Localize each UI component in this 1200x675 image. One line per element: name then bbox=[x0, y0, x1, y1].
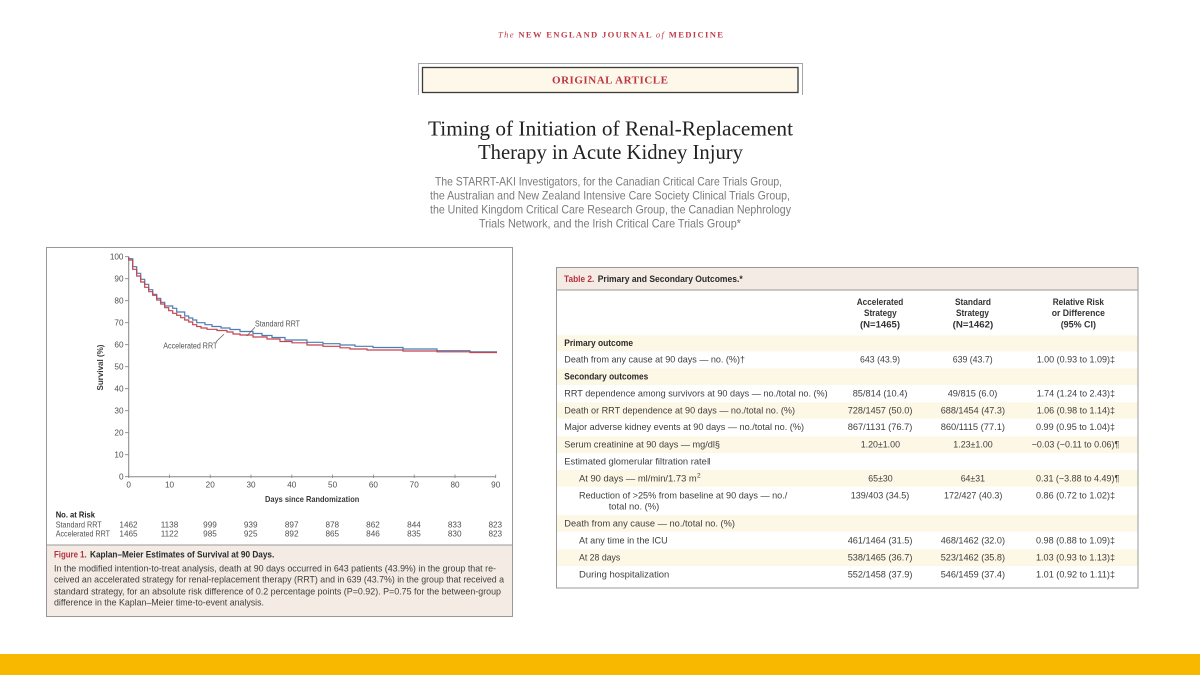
column: accelerated strategy values: 867/1131 (76.7) bbox=[848, 421, 912, 432]
column headers: Relative Risk bbox=[1053, 297, 1105, 307]
number at risk table: 939 bbox=[244, 521, 258, 530]
y axis labels: 30 bbox=[114, 407, 124, 416]
figure caption: In the modified intention-to-treat analysis, death at 90 days occurred in 643 patients (43.9%) in the group that re- bbox=[54, 562, 496, 573]
curve: standard RRT bbox=[129, 257, 497, 352]
y axis title: Survival (%) bbox=[95, 344, 105, 390]
x axis labels: 90 bbox=[491, 481, 501, 490]
y axis labels: 70 bbox=[114, 319, 124, 328]
y axis labels: 90 bbox=[114, 275, 124, 284]
column: accelerated strategy values: 461/1464 (31.5) bbox=[848, 535, 912, 546]
curve: accelerated RRT bbox=[129, 258, 497, 352]
figure caption bbox=[46, 545, 512, 616]
x axis labels: 0 bbox=[126, 481, 131, 490]
row bands bbox=[557, 335, 1138, 566]
row labels: Primary outcome bbox=[564, 337, 633, 348]
column headers: (N=1465) bbox=[860, 319, 900, 329]
number at risk table bbox=[56, 510, 503, 539]
row labels bbox=[564, 337, 828, 580]
article type banner: ORIGINAL ARTICLE bbox=[552, 75, 668, 87]
row labels: Major adverse kidney events at 90 days — no./total no. (%) bbox=[564, 421, 804, 432]
label: accelerated RRT bbox=[163, 334, 224, 350]
label: accelerated RRT: Accelerated RRT bbox=[163, 341, 217, 350]
panel: figure 1 Kaplan-Meier bbox=[46, 248, 512, 616]
x axis labels: 40 bbox=[287, 481, 297, 490]
number at risk table: 897 bbox=[285, 521, 299, 530]
column: accelerated strategy values: 552/1458 (37.9) bbox=[848, 569, 912, 580]
y axis labels: 60 bbox=[114, 341, 124, 350]
number at risk table: 823 bbox=[488, 530, 503, 539]
row labels: Serum creatinine at 90 days — mg/dl§ bbox=[564, 438, 720, 449]
row labels: Death from any cause — no./total no. (%) bbox=[564, 518, 735, 529]
row labels: At 28 days bbox=[579, 552, 621, 563]
row labels: total no. (%) bbox=[609, 501, 659, 512]
article title: Therapy in Acute Kidney Injury bbox=[478, 140, 743, 164]
article title bbox=[428, 117, 793, 164]
label: standard RRT bbox=[247, 319, 300, 336]
x axis labels: 30 bbox=[246, 481, 256, 490]
column: relative risk values: 0.31 (−3.88 to 4.49)¶ bbox=[1036, 472, 1119, 483]
column: accelerated strategy values: 139/403 (34.5) bbox=[851, 489, 909, 500]
number at risk table: Standard RRT bbox=[56, 521, 102, 530]
author list: the Australian and New Zealand Intensive Care Society Clinical Trials Group, bbox=[430, 189, 790, 202]
figure caption: Kaplan–Meier Estimates of Survival at 90 Days. bbox=[90, 548, 274, 559]
row labels: At 90 days — ml/min/1.73 m bbox=[579, 472, 697, 483]
y axis labels: 100 bbox=[110, 253, 124, 262]
x axis labels: 70 bbox=[410, 481, 419, 490]
number at risk table: 862 bbox=[366, 521, 380, 530]
x axis title: Days since Randomization bbox=[265, 494, 359, 504]
number at risk table: 846 bbox=[366, 530, 380, 539]
number at risk table: Accelerated RRT bbox=[56, 530, 110, 539]
column: standard strategy values: 546/1459 (37.4) bbox=[941, 569, 1005, 580]
column: standard strategy values: 639 (43.7) bbox=[953, 354, 993, 365]
column headers: (N=1462) bbox=[953, 319, 993, 329]
author list bbox=[430, 176, 791, 230]
number at risk table: 865 bbox=[325, 530, 340, 539]
number at risk table: 1138 bbox=[161, 521, 179, 530]
panel: table 2 outcomes bbox=[556, 268, 1138, 588]
figure caption: ceived an accelerated strategy for renal-replacement therapy (RRT) and in 639 (43.7%) in the group that received a bbox=[54, 574, 505, 585]
author list: the United Kingdom Critical Care Research Group, the Canadian Nephrology bbox=[430, 203, 791, 216]
column: accelerated strategy values: 1.20±1.00 bbox=[861, 438, 900, 449]
number at risk table: 1122 bbox=[161, 530, 179, 539]
number at risk table: 1465 bbox=[119, 530, 138, 539]
number at risk table: 985 bbox=[203, 530, 217, 539]
x axis labels: 50 bbox=[328, 481, 338, 490]
y axis labels: 80 bbox=[114, 297, 124, 306]
x axis labels: 80 bbox=[450, 481, 460, 490]
column: standard strategy values: 172/427 (40.3) bbox=[944, 489, 1002, 500]
number at risk table: 830 bbox=[448, 530, 462, 539]
column: relative risk values: 0.86 (0.72 to 1.02)‡ bbox=[1036, 489, 1115, 500]
column: standard strategy values: 860/1115 (77.1) bbox=[941, 421, 1005, 432]
footer band bbox=[0, 654, 1200, 675]
row labels: Estimated glomerular filtration rate‖ bbox=[564, 455, 711, 466]
article title: Timing of Initiation of Renal-Replacement bbox=[428, 117, 793, 141]
number at risk table: 999 bbox=[203, 521, 217, 530]
figure caption: difference in the Kaplan–Meier time-to-event analysis. bbox=[54, 597, 264, 608]
column: relative risk values bbox=[1032, 354, 1119, 580]
x axis labels bbox=[126, 481, 501, 490]
column: standard strategy values bbox=[941, 354, 1005, 580]
row labels: RRT dependence among survivors at 90 days — no./total no. (%) bbox=[564, 387, 828, 398]
column: relative risk values: 0.99 (0.95 to 1.04)‡ bbox=[1036, 421, 1115, 432]
x axis labels: 20 bbox=[206, 481, 215, 490]
y axis labels: 0 bbox=[119, 473, 124, 482]
y axis labels bbox=[110, 253, 124, 482]
column: accelerated strategy values: 643 (43.9) bbox=[860, 354, 900, 365]
column: accelerated strategy values: 65±30 bbox=[868, 472, 893, 483]
row labels: At any time in the ICU bbox=[579, 535, 668, 546]
number at risk table: 878 bbox=[325, 521, 340, 530]
number at risk table: 844 bbox=[407, 521, 421, 530]
figure caption: standard strategy, for an absolute risk difference of 0.2 percentage points (P=0.92). P=0.75 for the between-group bbox=[54, 585, 501, 596]
number at risk table: No. at Risk bbox=[56, 510, 95, 519]
column: accelerated strategy values: 85/814 (10.4) bbox=[853, 387, 907, 398]
number at risk table: 833 bbox=[448, 521, 462, 530]
row labels: Death from any cause at 90 days — no. (%)† bbox=[564, 354, 745, 365]
author list: Trials Network, and the Irish Critical Care Trials Group* bbox=[479, 217, 741, 230]
number at risk table: 823 bbox=[488, 521, 503, 530]
column headers: Strategy bbox=[956, 308, 989, 318]
chart: survival curves bbox=[95, 253, 501, 504]
column: accelerated strategy values: 728/1457 (50.0) bbox=[848, 404, 912, 415]
table title bar: Table 2. bbox=[564, 273, 594, 284]
table title bar bbox=[556, 268, 1138, 290]
row labels: During hospitalization bbox=[579, 569, 669, 580]
x axis labels: 10 bbox=[165, 481, 174, 490]
column: relative risk values: 1.01 (0.92 to 1.11)‡ bbox=[1036, 569, 1115, 580]
column: standard strategy values: 688/1454 (47.3) bbox=[941, 404, 1005, 415]
column: relative risk values: 1.06 (0.98 to 1.14)‡ bbox=[1037, 404, 1115, 415]
row labels: 2 bbox=[697, 472, 701, 480]
row labels: Reduction of >25% from baseline at 90 days — no./ bbox=[579, 489, 788, 500]
column: relative risk values: 0.98 (0.88 to 1.09)‡ bbox=[1036, 535, 1115, 546]
number at risk table: 925 bbox=[244, 530, 258, 539]
author list: The STARRT-AKI Investigators, for the Canadian Critical Care Trials Group, bbox=[435, 176, 782, 189]
column: relative risk values: 1.00 (0.93 to 1.09)‡ bbox=[1037, 354, 1115, 365]
y axis labels: 10 bbox=[114, 451, 124, 460]
column: standard strategy values: 468/1462 (32.0) bbox=[941, 535, 1005, 546]
column: accelerated strategy values: 538/1465 (36.7) bbox=[848, 552, 912, 563]
article type banner bbox=[418, 64, 802, 95]
column headers: (95% CI) bbox=[1061, 319, 1096, 329]
table title bar: Primary and Secondary Outcomes.* bbox=[598, 273, 743, 284]
y axis labels: 20 bbox=[114, 429, 124, 438]
number at risk table: 1462 bbox=[119, 521, 138, 530]
column: standard strategy values: 523/1462 (35.8) bbox=[941, 552, 1005, 563]
column: standard strategy values: 64±31 bbox=[961, 472, 985, 483]
column: relative risk values: 1.74 (1.24 to 2.43)‡ bbox=[1037, 387, 1115, 398]
number at risk table: 835 bbox=[407, 530, 421, 539]
column headers: or Difference bbox=[1052, 308, 1105, 318]
y axis labels: 50 bbox=[114, 363, 124, 372]
column headers bbox=[857, 297, 1105, 329]
column: standard strategy values: 1.23±1.00 bbox=[953, 438, 993, 449]
y axis labels: 40 bbox=[114, 385, 124, 394]
row labels: Death or RRT dependence at 90 days — no./total no. (%) bbox=[564, 404, 795, 415]
label: standard RRT: Standard RRT bbox=[255, 319, 300, 328]
column headers: Accelerated bbox=[857, 297, 903, 307]
column: accelerated strategy values bbox=[848, 354, 912, 580]
column headers: Standard bbox=[955, 297, 991, 307]
column headers: Strategy bbox=[864, 308, 897, 318]
journal masthead: The NEW ENGLAND JOURNAL of MEDICINE bbox=[498, 30, 723, 40]
column: relative risk values: −0.03 (−0.11 to 0.06)¶ bbox=[1032, 438, 1119, 449]
row labels: Secondary outcomes bbox=[564, 370, 648, 381]
column: relative risk values: 1.03 (0.93 to 1.13)‡ bbox=[1036, 552, 1115, 563]
x axis labels: 60 bbox=[369, 481, 378, 490]
figure caption: Figure 1. bbox=[54, 548, 87, 559]
column: standard strategy values: 49/815 (6.0) bbox=[948, 387, 997, 398]
number at risk table: 892 bbox=[285, 530, 299, 539]
